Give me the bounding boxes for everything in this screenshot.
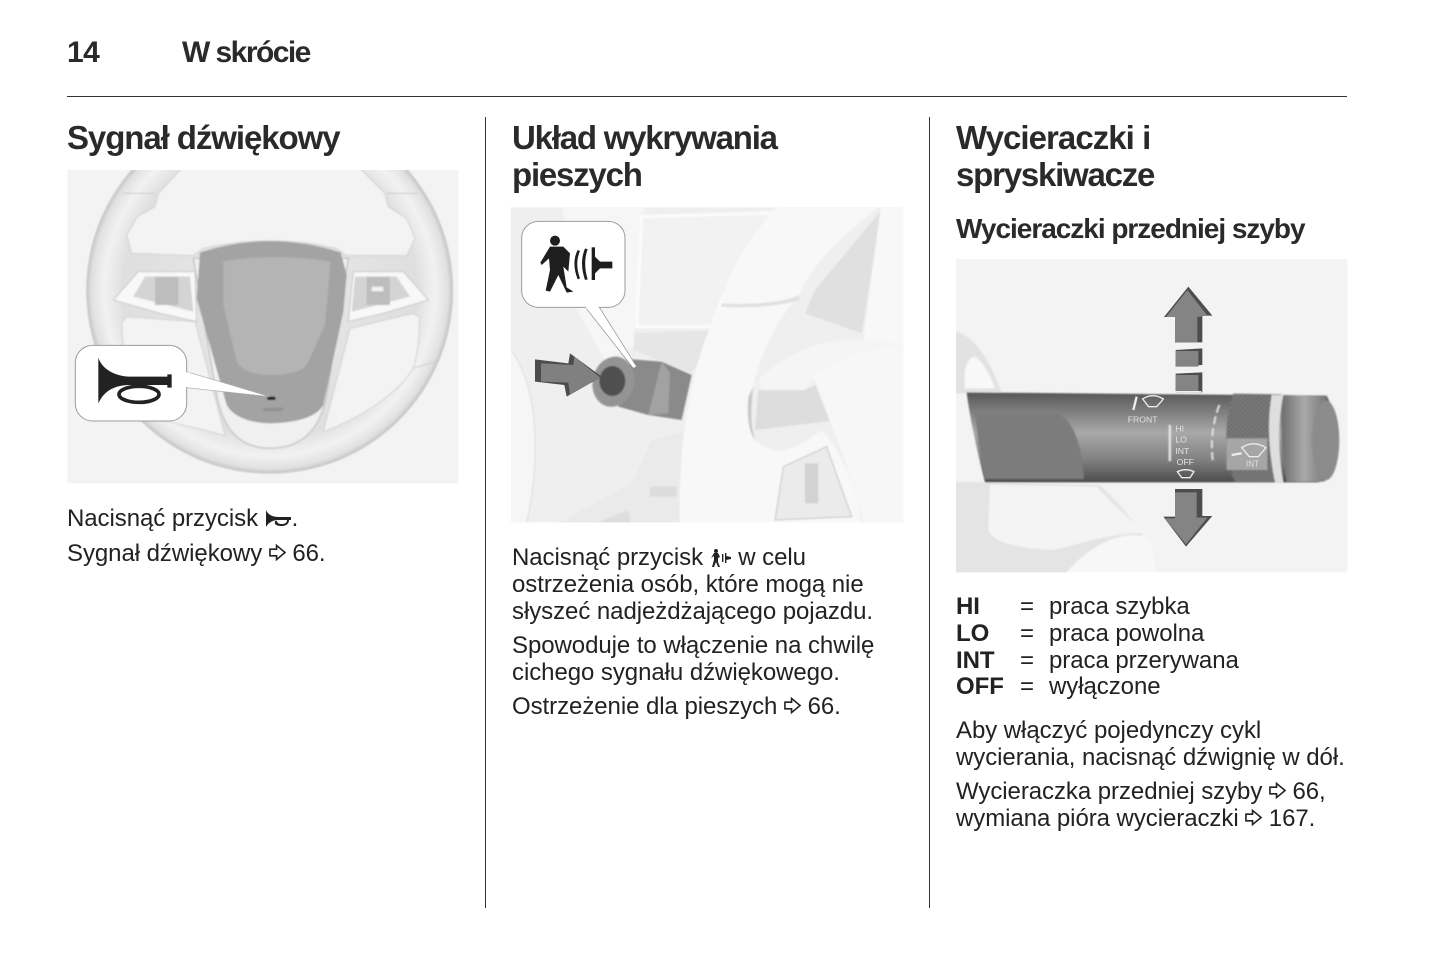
text: wiper instructions [956, 717, 1345, 832]
stalk [967, 392, 1339, 482]
stalk labels [1128, 414, 1259, 469]
panel: wiper stalk [956, 259, 1347, 572]
text: wiper instructions: wycierania, nacisnąć dźwignię w dół. [956, 744, 1345, 771]
icons: wiper symbols [1133, 396, 1266, 478]
heading: wipers and washers: Wycieraczki i [956, 119, 1150, 156]
text: horn instructions: Nacisnąć przycisk . [67, 505, 298, 532]
hub surround [193, 258, 348, 448]
table: wiper positions: = [1020, 593, 1034, 620]
stalk labels: HI [1175, 424, 1184, 434]
panel: steering wheel with horn callout [68, 170, 458, 483]
text: pedestrian warning instructions: ostrzeżenia osób, które mogą nie [512, 571, 864, 598]
stalk labels: INT [1246, 460, 1259, 469]
icon: pedestrian and sound [540, 236, 612, 293]
text: pedestrian warning instructions: Spowoduje to włączenie na chwilę [512, 632, 874, 659]
hand [950, 331, 1002, 393]
table: wiper positions: INT [956, 647, 994, 674]
table: wiper positions: = [1020, 673, 1034, 700]
panel: pedestrian warning stalk [511, 208, 904, 522]
stalk labels: OFF [1177, 457, 1194, 467]
arrow: push button [535, 353, 602, 397]
text: wiper instructions: Aby włączyć pojedynczy cykl [956, 717, 1261, 744]
table: wiper positions: = [1020, 647, 1034, 674]
callout: pedestrian symbol [522, 221, 637, 368]
table: wiper positions: praca powolna [1049, 620, 1204, 647]
heading: pedestrian warning [512, 119, 778, 193]
stalk labels: LO [1175, 434, 1187, 444]
table: wiper positions: wyłączone [1049, 673, 1161, 700]
stalk labels: FRONT [1128, 414, 1158, 424]
table: wiper positions: praca szybka [1049, 593, 1190, 620]
subheading: windscreen wipers: Wycieraczki przedniej szyby [956, 213, 1305, 244]
arrow: up segment lower [1174, 372, 1202, 392]
scale marks [1212, 405, 1219, 460]
stalk [618, 359, 692, 420]
section title: W skrócie [182, 36, 310, 69]
table: wiper positions: = [1020, 620, 1034, 647]
heading: pedestrian warning: Układ wykrywania [512, 119, 777, 156]
wheel rim [680, 208, 876, 522]
right side shapes [805, 210, 882, 333]
dashboard and screen [606, 356, 612, 360]
arrow: up [1164, 287, 1212, 342]
page number: 14 [67, 36, 99, 69]
text: wiper instructions: wymiana pióra wycieraczki 167. [956, 805, 1315, 832]
text: pedestrian warning instructions: cichego sygnału dźwiękowego. [512, 659, 840, 686]
heading: pedestrian warning: pieszych [512, 156, 642, 193]
arrow: down [1163, 489, 1212, 547]
heading: wipers and washers: spryskiwacze [956, 156, 1154, 193]
text: horn instructions: Sygnał dźwiękowy 66. [67, 540, 326, 567]
text: pedestrian warning instructions: słyszeć nadjeżdżającego pojazdu. [512, 598, 873, 625]
table: wiper positions: praca przerywana [1049, 647, 1239, 674]
text: horn instructions [67, 505, 326, 567]
wheel rim [86, 170, 454, 474]
table: wiper positions: HI [956, 593, 980, 620]
icon: horn [98, 358, 172, 404]
text: pedestrian warning instructions: Nacisnąć przycisk w celu [512, 544, 806, 571]
grip [1226, 394, 1282, 482]
callout: horn symbol [75, 345, 270, 421]
text: pedestrian warning instructions: Ostrzeżenie dla pieszych 66. [512, 693, 841, 720]
table: wiper positions: OFF [956, 673, 1004, 700]
table: wiper positions [956, 593, 1239, 700]
hub [197, 241, 347, 423]
heading: wipers and washers [956, 119, 1154, 193]
button panel [775, 447, 852, 520]
text: wiper instructions: Wycieraczka przedniej szyby 66, [956, 778, 1326, 805]
table: wiper positions: LO [956, 620, 989, 647]
spokes [113, 272, 197, 322]
heading: horn: Sygnał dźwiękowy [67, 119, 339, 156]
text: pedestrian warning instructions [512, 544, 874, 720]
stalk labels: INT [1175, 446, 1190, 456]
arrow: up segment [1176, 348, 1202, 367]
